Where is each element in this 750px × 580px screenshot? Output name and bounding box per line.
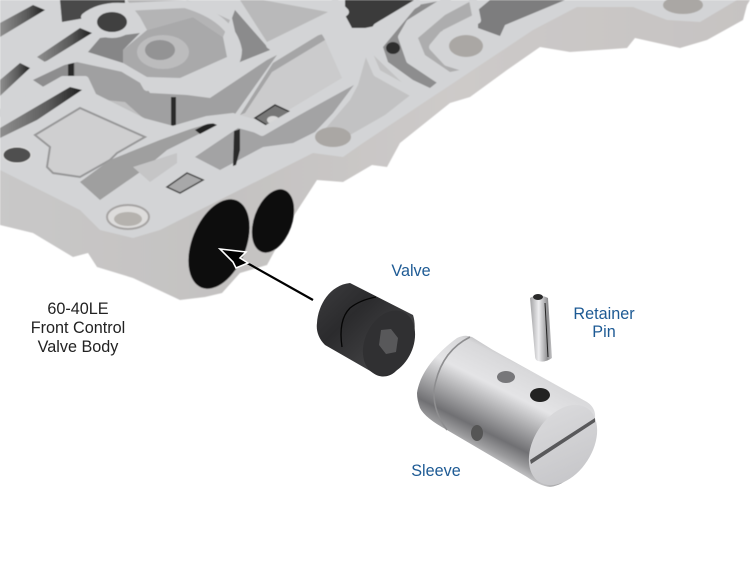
top cavity above arc <box>127 0 230 37</box>
curved cavity 2 <box>418 0 473 72</box>
small square pocket <box>167 173 203 193</box>
gasket strips <box>0 0 477 132</box>
pin slit <box>545 303 548 357</box>
central boss hollow <box>145 40 175 60</box>
label: valve body: Valve Body <box>38 338 119 356</box>
bolt hole right 2 <box>449 35 483 57</box>
right floor cavity <box>240 33 342 123</box>
label: valve body: 60-40LE <box>47 300 109 318</box>
valve part <box>317 283 425 384</box>
bore opening small <box>244 183 302 259</box>
valve body casting <box>0 0 750 300</box>
sleeve end slot <box>530 418 595 464</box>
bore opening large <box>176 190 262 298</box>
label: retainer pin: Retainer <box>573 305 635 323</box>
lower cavity dark tip <box>195 122 217 134</box>
threaded hole left <box>3 147 31 163</box>
bolt hole top <box>97 12 127 32</box>
bolt hole right 3 <box>663 0 703 14</box>
curved cavity 1 <box>383 0 445 88</box>
sleeve hole right <box>530 388 550 402</box>
curved cavity 1 shadow <box>386 42 400 54</box>
bolt hole inner <box>114 212 142 226</box>
retainer pin part <box>530 294 552 362</box>
pin in pocket <box>267 116 279 124</box>
pin hole <box>533 294 543 300</box>
gasket top face <box>0 0 737 238</box>
sleeve hole bottom <box>471 425 483 441</box>
pillar floor highlight <box>105 100 143 118</box>
right long cavity <box>195 85 354 170</box>
upper-left cavities <box>0 0 125 138</box>
valve body <box>317 283 415 376</box>
bolt hole front <box>107 205 149 229</box>
casting side wall <box>0 0 750 300</box>
top-right light cavity <box>240 0 328 42</box>
right floor cavity shadow <box>240 33 325 115</box>
sleeve part <box>417 336 611 498</box>
curved cavity 3 <box>478 0 565 36</box>
label: valve body: Front Control <box>31 319 125 337</box>
right floor around bolt <box>320 50 413 135</box>
right long cavity streak <box>233 129 240 166</box>
label: sleeve: Sleeve <box>411 462 461 480</box>
lower cavity light floor <box>133 153 177 182</box>
sleeve end face <box>515 392 611 498</box>
cavity beside boss <box>88 33 140 63</box>
bolt hole right 1 <box>315 127 351 147</box>
valve end face <box>353 302 425 384</box>
label: retainer pin: Pin <box>592 323 616 341</box>
arrow to bore <box>220 249 313 300</box>
valve hex socket <box>379 329 398 354</box>
wedge outside arc <box>190 10 270 88</box>
label: valve: Valve <box>391 262 431 280</box>
lower long cavity <box>80 122 217 200</box>
top dark cavity right <box>345 0 420 28</box>
round central boss <box>137 35 189 69</box>
small pin pocket <box>255 105 290 127</box>
sleeve body <box>417 336 595 487</box>
centre arc cavity <box>123 17 227 78</box>
left light cavity <box>35 108 145 177</box>
sleeve hole top <box>497 371 515 383</box>
pin body <box>530 296 552 362</box>
pillar dark streaks <box>68 62 176 128</box>
bolt hole top boss <box>90 8 134 38</box>
sleeve back collar <box>434 337 470 430</box>
valve groove <box>341 297 376 347</box>
pillar cavity <box>75 55 277 130</box>
